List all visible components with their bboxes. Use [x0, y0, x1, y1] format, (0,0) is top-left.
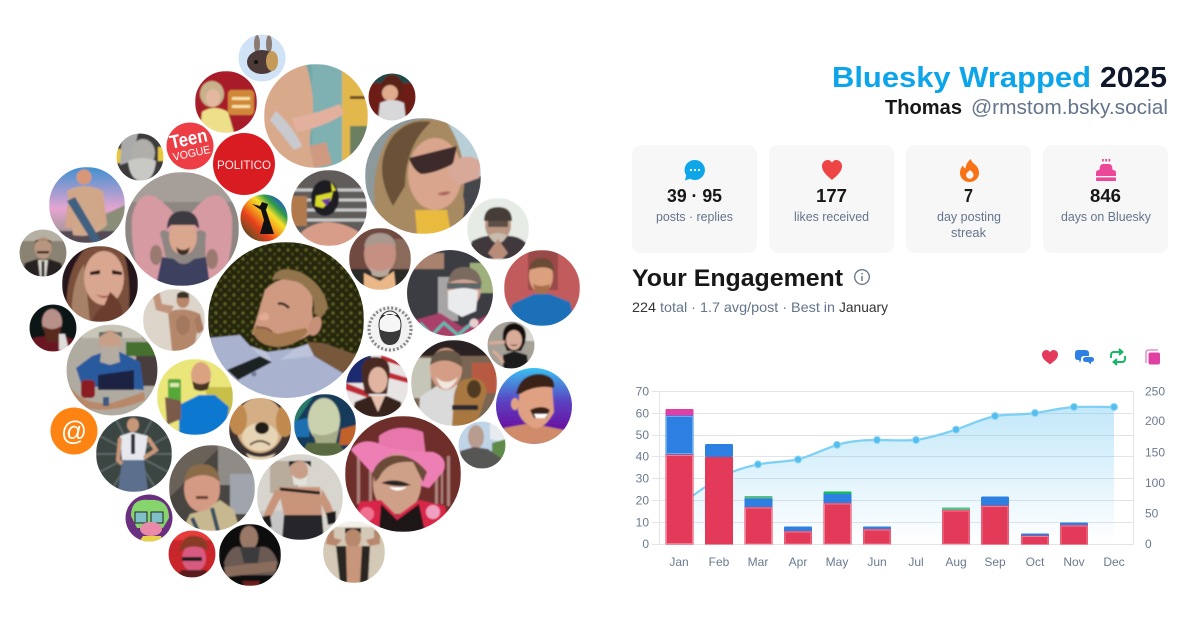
stat value: 39 · 95	[667, 186, 722, 206]
engagement summary text: total · 1.7 avg/post · Best in	[660, 299, 835, 315]
bar: Oct	[1021, 534, 1049, 544]
month labels: Feb	[709, 555, 730, 569]
avatar: man in blue shirt	[504, 250, 580, 326]
avatar: man holding book in blue scrubs	[157, 359, 233, 435]
avatar: teen vogue logo: VOGUE	[172, 144, 211, 164]
stat label: posts · replies	[656, 210, 733, 224]
month labels: Sep	[984, 555, 1006, 569]
user name and handle: @rmstom.bsky.social	[971, 97, 1168, 119]
avatar: pilot in front of jet turbine	[96, 416, 172, 492]
avatar: pink-lit portrait in sunglasses	[168, 530, 216, 578]
avatar: man with crossed arms	[219, 524, 281, 586]
bar: May	[824, 492, 852, 544]
month labels: Apr	[789, 555, 807, 569]
bar: Nov	[1060, 522, 1088, 544]
chart gridlines and axes	[652, 391, 1134, 544]
avatar: man with arms raised	[125, 172, 239, 286]
left axis labels: 40	[636, 450, 649, 464]
right axis labels	[1145, 384, 1165, 551]
avatar: orange at-sign placeholder	[50, 408, 98, 454]
panel: day posting streak stat	[906, 145, 1031, 253]
icon: reposts arrows	[1111, 349, 1125, 365]
avatar: green-haired cartoon	[125, 494, 173, 542]
bar: Mar	[744, 496, 772, 544]
month labels	[669, 555, 1125, 569]
user name and handle	[885, 97, 1168, 119]
month labels: Oct	[1026, 555, 1045, 569]
left axis labels	[636, 384, 649, 551]
bar: Jan	[666, 409, 694, 544]
avatar: teen vogue logo	[166, 122, 214, 170]
stat label	[937, 210, 1001, 240]
avatar: green-tinted man on blue	[294, 394, 356, 456]
cumulative line	[679, 407, 1114, 506]
avatar: woman in sunglasses	[365, 118, 481, 234]
right axis labels: 50	[1145, 506, 1159, 520]
bar: Jun	[863, 526, 891, 544]
title: Bluesky Wrapped 2025: Bluesky Wrapped	[832, 62, 1091, 94]
month labels: Mar	[748, 555, 768, 569]
engagement summary text: January	[839, 299, 888, 315]
right axis labels: 0	[1145, 537, 1152, 551]
panel: avatar bubble cluster	[19, 34, 580, 586]
avatar: golden girls poster	[195, 71, 257, 133]
avatar: woman with black lipstick	[487, 321, 535, 369]
bar: Feb	[705, 444, 733, 544]
avatar: bearded man illustration	[116, 133, 164, 181]
icon: chat bubble	[685, 160, 705, 180]
avatar: golden retriever	[229, 397, 294, 460]
right axis labels: 150	[1145, 446, 1165, 460]
avatar: man in pink cowboy hat	[345, 416, 461, 532]
month labels: Aug	[945, 555, 967, 569]
month labels: Dec	[1103, 555, 1125, 569]
panel: posts and replies stat	[632, 145, 757, 253]
cumulative area	[679, 407, 1114, 544]
month labels: Jul	[908, 555, 924, 569]
panel: days on Bluesky stat	[1043, 145, 1168, 253]
avatar: man with sangria	[66, 324, 158, 416]
avatar: orange at-sign placeholder: @	[61, 416, 87, 446]
title: Bluesky Wrapped 2025: 2025	[1100, 62, 1167, 94]
avatar: sketch of bearded man	[366, 305, 414, 353]
avatar: woman with flag backdrop	[346, 355, 408, 417]
avatar: man on subway platform	[169, 445, 255, 531]
avatar: person by teal wall	[264, 64, 368, 168]
stat value: 7	[964, 186, 973, 206]
avatar: politico logo	[213, 133, 275, 195]
left axis labels: 70	[636, 384, 649, 398]
stat value: 846	[1090, 186, 1121, 206]
avatar: bee bunny illustration	[238, 34, 286, 82]
avatar: cartoon man on purple gradient	[495, 367, 573, 445]
left axis labels: 60	[636, 406, 649, 420]
stat value: 177	[816, 186, 847, 206]
avatar: woman with long brown hair	[62, 246, 138, 322]
month labels: Jan	[669, 555, 689, 569]
right axis labels: 250	[1145, 384, 1165, 398]
cumulative points	[754, 404, 1118, 468]
left axis labels: 10	[636, 516, 649, 530]
engagement summary text: 224	[632, 299, 656, 315]
avatar: toddler portrait	[368, 73, 416, 121]
right axis labels: 100	[1145, 476, 1165, 490]
avatar: woman in face mask in car	[406, 249, 494, 337]
left axis labels: 50	[636, 428, 649, 442]
avatar: bearded man in dark	[29, 304, 77, 352]
left axis labels: 30	[636, 472, 649, 486]
month labels: Nov	[1063, 555, 1085, 569]
avatar: rainbow silhouette	[240, 194, 288, 242]
icon: quotes squares	[1146, 350, 1160, 364]
left axis labels: 20	[636, 494, 649, 508]
bar: Sep	[981, 496, 1009, 544]
user name and handle: Thomas	[885, 97, 962, 119]
icon: info	[855, 270, 869, 284]
chart: monthly engagement stacked bars with cumulative line	[636, 384, 1165, 569]
avatar: flexing man in open leather vest	[323, 521, 385, 583]
legend icons	[1042, 349, 1160, 365]
avatar: teen vogue logo: Teen	[168, 125, 209, 154]
stat label: likes received	[794, 210, 869, 224]
month labels: Jun	[867, 555, 887, 569]
icon: heart	[822, 160, 842, 180]
avatar: smiling man in peach polo	[349, 228, 411, 290]
panel: likes received stat	[769, 145, 894, 253]
icon: birthday cake	[1096, 159, 1116, 181]
avatar: man in grey tee under sky	[458, 421, 506, 469]
bar: Apr	[784, 526, 812, 544]
stacked bars	[666, 409, 1088, 544]
right axis labels: 200	[1145, 414, 1165, 428]
stat label: days on Bluesky	[1061, 210, 1152, 224]
month labels: May	[826, 555, 848, 569]
icon: replies bubbles	[1075, 350, 1094, 364]
avatar: older man with cap	[467, 198, 529, 260]
avatar: man at desert sunset	[49, 167, 125, 243]
avatar: central man in blue polo by hedge	[208, 242, 364, 400]
avatar: man with puppy hood	[291, 170, 367, 246]
left axis labels: 0	[642, 537, 649, 551]
engagement summary text	[632, 299, 888, 315]
icon: likes heart	[1042, 350, 1058, 364]
avatar: flexing shirtless man	[143, 289, 205, 351]
avatar: man in leather harness	[257, 454, 343, 540]
bar: Aug	[942, 508, 970, 544]
avatar: man in suit	[19, 229, 67, 277]
stat label: streak	[951, 226, 987, 240]
avatar: smiling man with chihuahua	[411, 340, 497, 426]
heading: Your Engagement: Your Engagement	[632, 265, 843, 292]
avatar: politico logo: POLITICO	[217, 158, 271, 172]
icon: flame	[960, 159, 979, 182]
stat label: day posting	[937, 210, 1001, 224]
